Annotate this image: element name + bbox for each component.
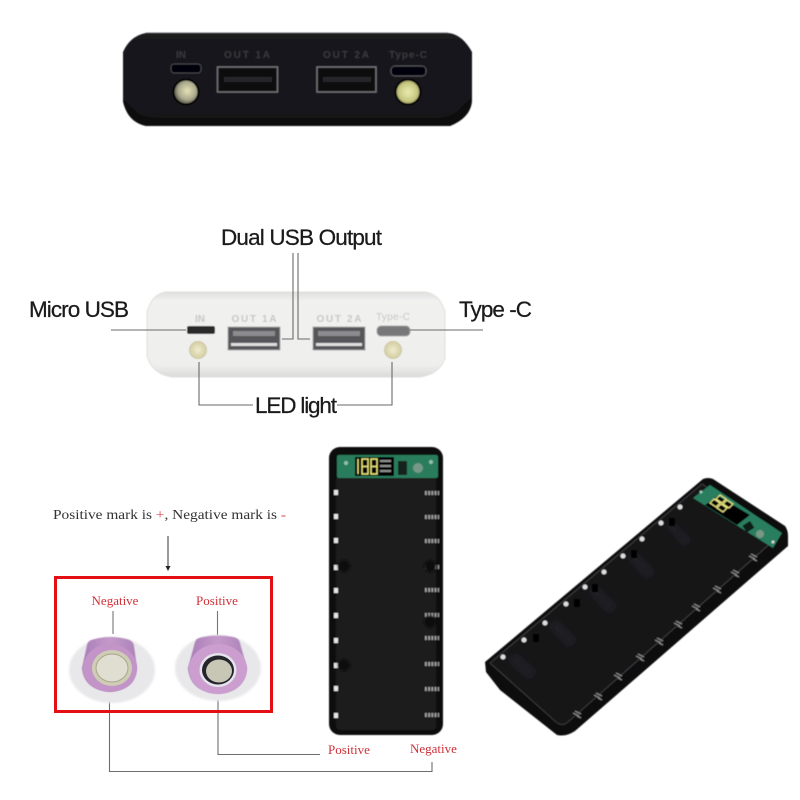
circuit board, upright (337, 455, 438, 478)
label: Positive (top): Positive (196, 593, 238, 608)
white power bank, labelled port diagram (29, 225, 532, 418)
white device body: IN (195, 314, 205, 325)
red frame (56, 578, 272, 712)
right contacts, upright (425, 493, 439, 715)
port labels, black device: OUT 1A (224, 50, 270, 61)
battery: negative end (69, 637, 155, 703)
heading: polarity note: Positive mark is +, Negative mark is - (53, 508, 286, 523)
LED left, black device (174, 80, 198, 104)
label: Negative (bottom): Negative (410, 741, 457, 756)
battery: positive end (175, 635, 261, 701)
label: Negative (top): Negative (92, 593, 139, 608)
USB port 1, black device (218, 67, 278, 92)
port labels, black device: IN (176, 50, 186, 61)
white device body: Type-C (376, 312, 410, 323)
LED right, black device (396, 80, 420, 104)
label: Dual USB Output: Dual USB Output (221, 225, 383, 250)
micro USB port, black device (171, 64, 201, 73)
label: Positive (bottom): Positive (328, 742, 370, 757)
white device body: OUT 2A (316, 314, 362, 325)
port labels, black device (176, 50, 427, 61)
white device body: OUT 1A (232, 314, 276, 325)
port labels, black device: Type-C (389, 50, 427, 61)
label: LED light: LED light (255, 393, 338, 418)
arrow: note to red box (166, 536, 170, 571)
label: Type -C: Type -C (459, 297, 532, 322)
type-C port, black device (391, 66, 426, 76)
white device body (147, 292, 445, 377)
black power bank, front ports (123, 33, 472, 126)
left contacts, angled (500, 504, 682, 660)
port labels, black device: OUT 2A (323, 50, 369, 61)
panel: battery polarity (56, 578, 272, 712)
interior shading, angled (505, 519, 694, 682)
label: Micro USB: Micro USB (29, 297, 129, 322)
open battery case, angled (485, 478, 788, 736)
left contacts, upright (334, 490, 338, 718)
leader lines, port diagram (111, 253, 483, 405)
clips, angled (533, 518, 675, 642)
USB port 2, black device (317, 67, 376, 92)
connector lines from battery ends (110, 697, 432, 772)
right contacts, angled (573, 554, 757, 718)
open battery case, upright (329, 447, 443, 735)
circuit board, angled (693, 485, 782, 548)
